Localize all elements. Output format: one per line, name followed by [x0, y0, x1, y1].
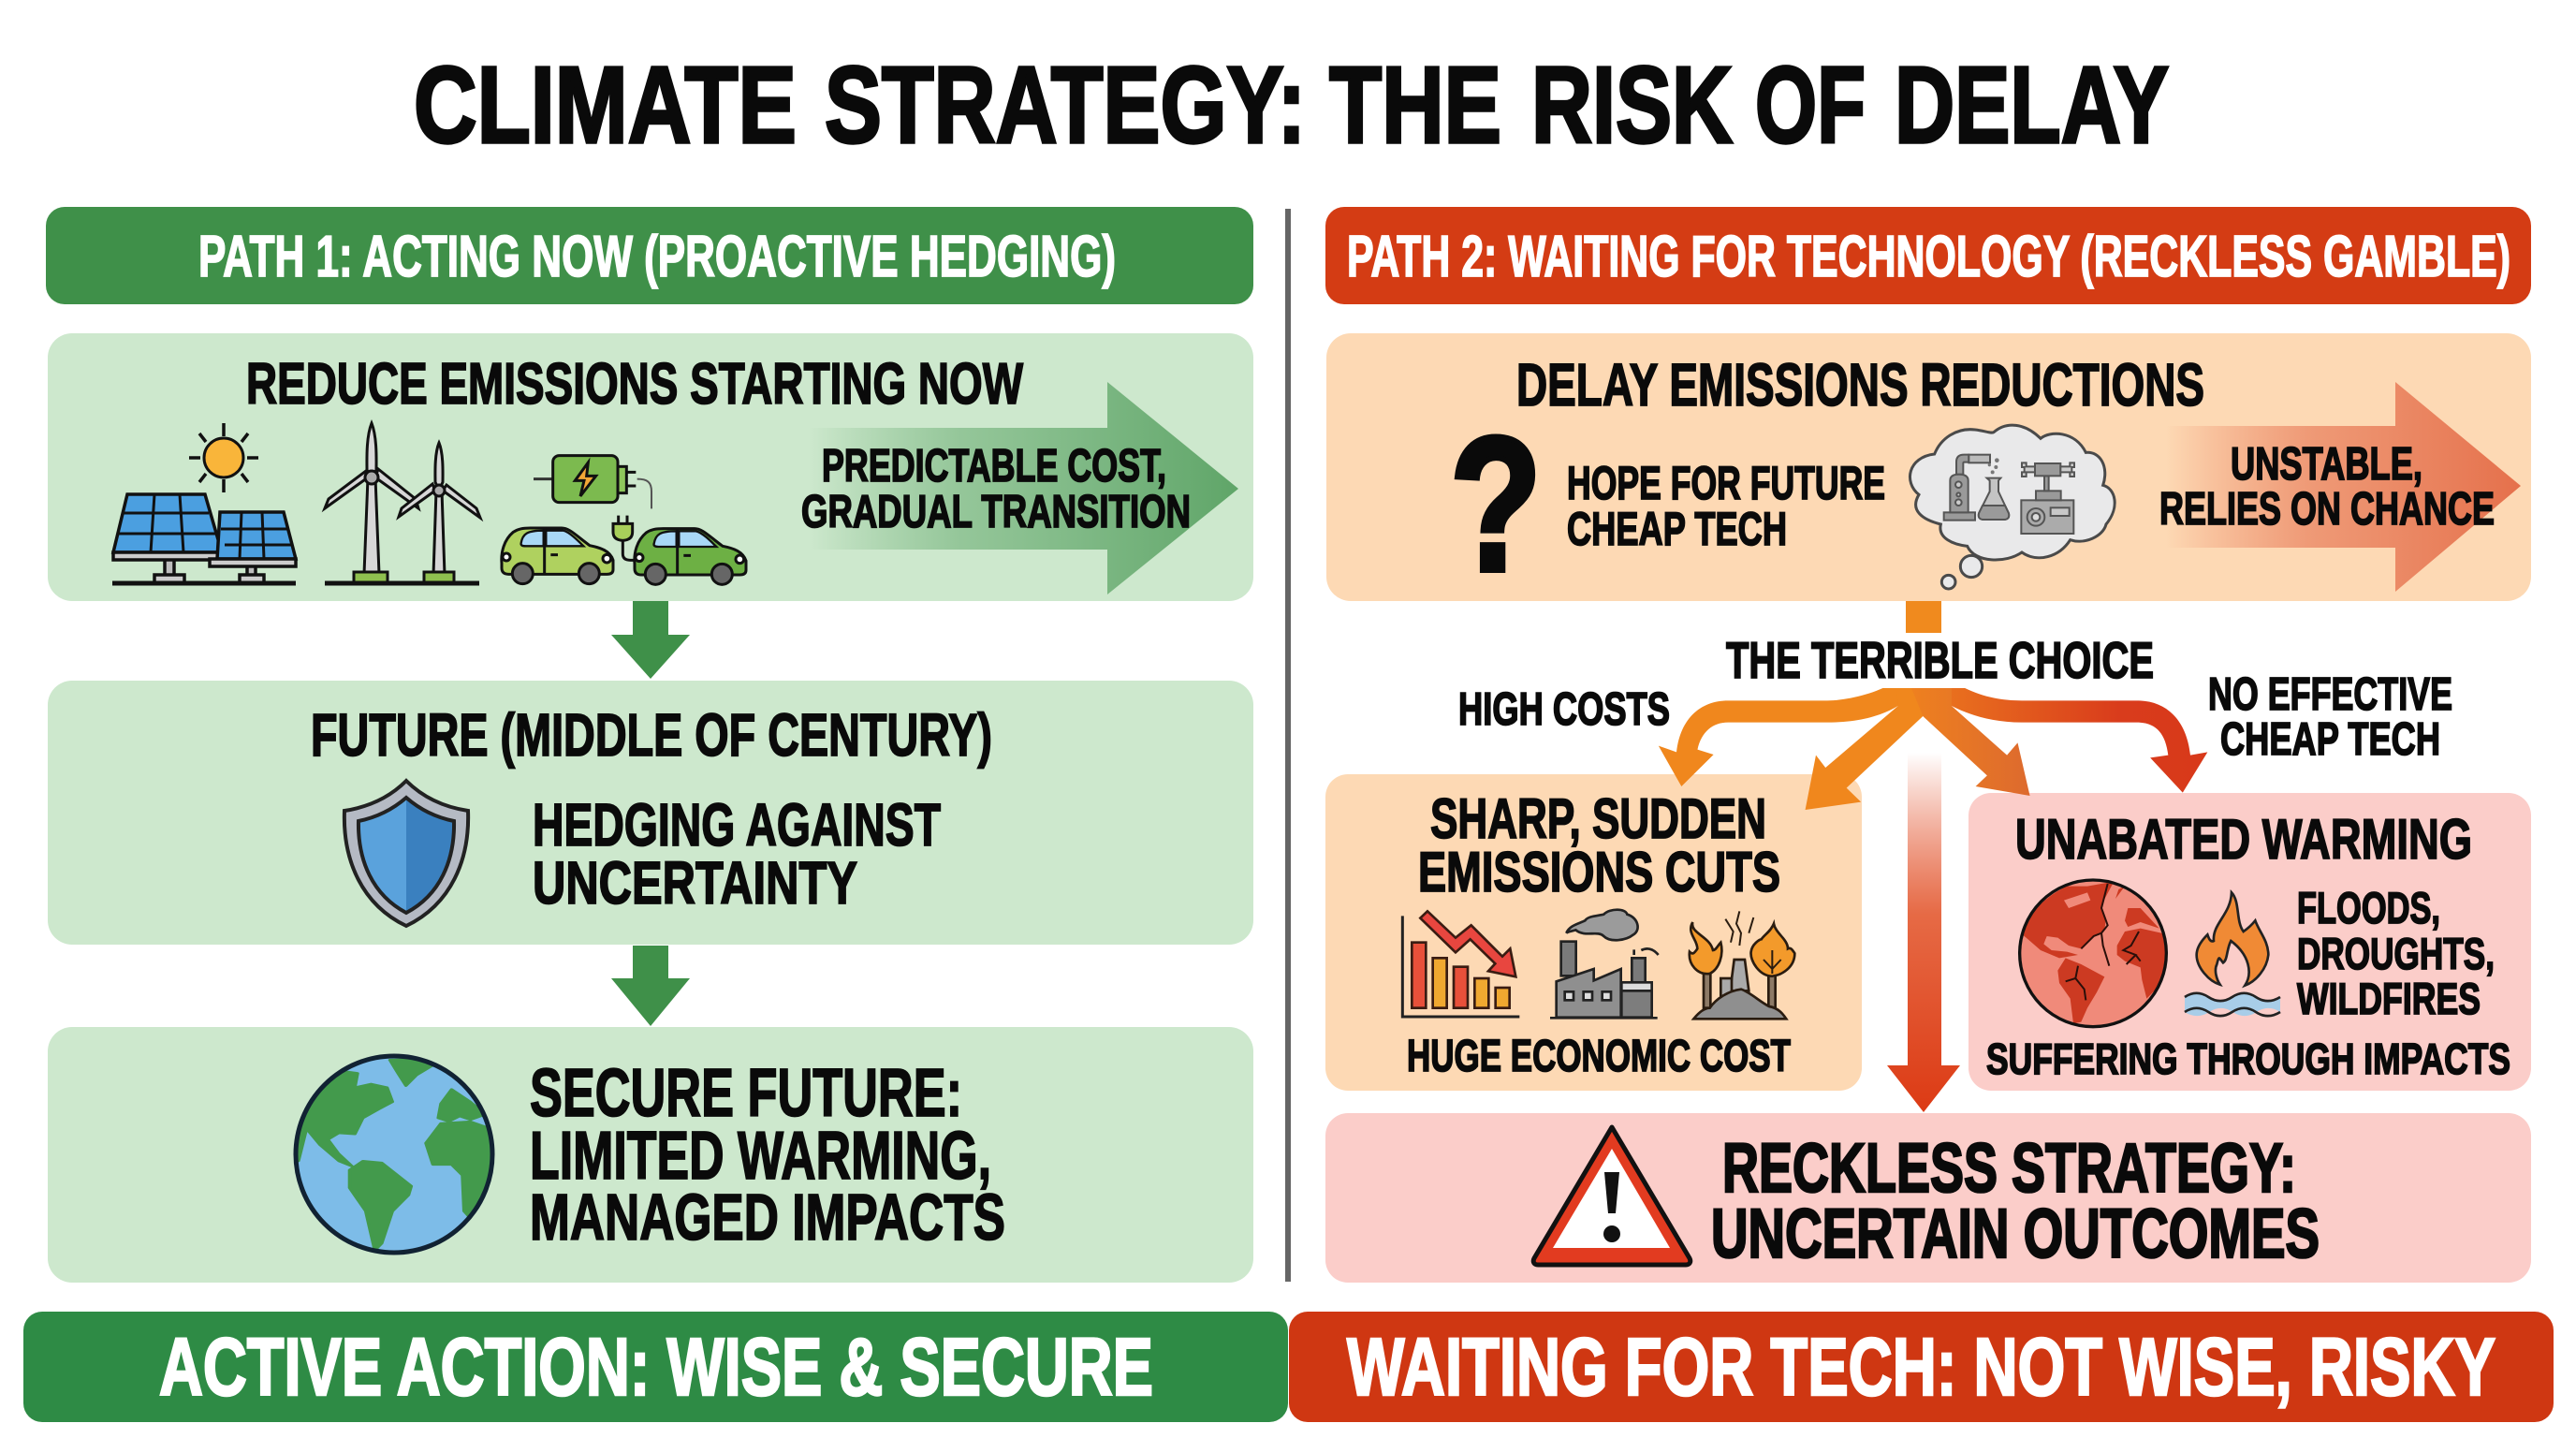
text: hope: HOPE FOR FUTURE [1567, 457, 1885, 509]
text: managed impacts: MANAGED IMPACTS [530, 1181, 1005, 1254]
arrow: unstable [2159, 382, 2521, 592]
title: RISK [1531, 44, 1733, 166]
text: hedging: HEDGING AGAINST [533, 791, 941, 858]
arrow: to unabated warming diagonal [1911, 688, 2030, 796]
icon: question mark: ? [1450, 398, 1542, 611]
text: uncertainty: UNCERTAINTY [533, 849, 857, 917]
arrow: to sharp cuts diagonal [1806, 688, 1935, 810]
title: OF [1755, 44, 1866, 166]
icon: cracked hot globe [2019, 880, 2169, 1027]
title: STRATEGY: [825, 44, 1306, 166]
arrow: to sharp cuts [1659, 688, 1923, 786]
connector: orange stem [1906, 601, 1941, 633]
heading: future: FUTURE (MIDDLE OF CENTURY) [311, 701, 992, 769]
icon: sun [189, 423, 258, 492]
icon: battery, charger and electric cars [502, 456, 746, 584]
text: floods droughts wildfires [2297, 883, 2495, 1023]
heading: sharp sudden emissions cuts: EMISSIONS CUTS [1418, 841, 1780, 903]
title: THE [1329, 44, 1501, 166]
heading: sharp sudden emissions cuts [1418, 787, 1780, 903]
text: uncertain outcomes: UNCERTAIN OUTCOMES [1711, 1195, 2320, 1272]
arrow: predictable cost: GRADUAL TRANSITION [801, 487, 1191, 537]
title: DELAY [1895, 44, 2169, 166]
heading: reduce emissions: REDUCE EMISSIONS STARTING NOW [246, 352, 1023, 417]
text: cheap tech: CHEAP TECH [1567, 503, 1787, 555]
arrow: to unabated warming [1923, 688, 2207, 793]
header: path 1 [46, 207, 1253, 304]
panel: reckless strategy [1325, 1113, 2531, 1283]
icon: warning triangle [1533, 1127, 1690, 1265]
heading: delay: DELAY EMISSIONS REDUCTIONS [1516, 351, 2204, 418]
icon: factory [1550, 910, 1659, 1018]
icon: wind turbines [325, 423, 480, 583]
icon: burning trees [1690, 911, 1794, 1019]
arrow: down 1 [611, 601, 690, 679]
text: floods droughts wildfires: DROUGHTS, [2297, 929, 2495, 978]
label: no effective cheap tech [2208, 669, 2452, 765]
icon: healthy globe [296, 1056, 494, 1253]
label: high costs: HIGH COSTS [1458, 684, 1670, 735]
arrow: predictable cost [801, 382, 1238, 594]
heading: sharp sudden emissions cuts: SHARP, SUDDEN [1430, 787, 1766, 850]
icon: falling chart [1402, 911, 1519, 1017]
text: limited warming: LIMITED WARMING, [530, 1119, 991, 1194]
title: CLIMATE [414, 44, 797, 166]
text: floods droughts wildfires: FLOODS, [2297, 883, 2440, 932]
panel: future [48, 681, 1253, 945]
label: the terrible choice: THE TERRIBLE CHOICE [1726, 631, 2154, 689]
header: path 2 [1325, 207, 2531, 304]
panel: secure future [48, 1027, 1253, 1283]
text: secure future: SECURE FUTURE: [530, 1056, 962, 1131]
arrow: unstable: UNSTABLE, [2231, 439, 2422, 490]
text: floods droughts wildfires: WILDFIRES [2297, 974, 2481, 1023]
panel: sharp sudden cuts [1325, 774, 1862, 1091]
header: path 1: PATH 1: ACTING NOW (PROACTIVE HEDGING) [198, 225, 1116, 289]
icon: thought cloud with lab tech [1910, 425, 2115, 589]
label: no effective cheap tech: CHEAP TECH [2220, 714, 2440, 765]
title [414, 44, 2169, 166]
text: huge economic cost: HUGE ECONOMIC COST [1407, 1032, 1791, 1081]
panel: delay emissions reductions [1326, 333, 2531, 611]
icon: shield [344, 781, 468, 926]
footer: active action [23, 1312, 1288, 1422]
text: reckless strategy: RECKLESS STRATEGY: [1722, 1129, 2296, 1207]
icon: flame and water [2185, 892, 2280, 1016]
arrow: predictable cost: PREDICTABLE COST, [822, 441, 1166, 492]
label: no effective cheap tech: NO EFFECTIVE [2208, 669, 2452, 720]
arrow: down 2 [611, 946, 690, 1026]
panel: reduce emissions now [48, 333, 1253, 601]
footer: active action: ACTIVE ACTION: WISE & SECURE [159, 1322, 1153, 1413]
arrows: terrible choice branches [1659, 688, 2207, 810]
arrow: centre to reckless strategy [1887, 753, 1960, 1112]
icon: solar panels [112, 494, 296, 583]
panel: unabated warming [1969, 793, 2531, 1091]
